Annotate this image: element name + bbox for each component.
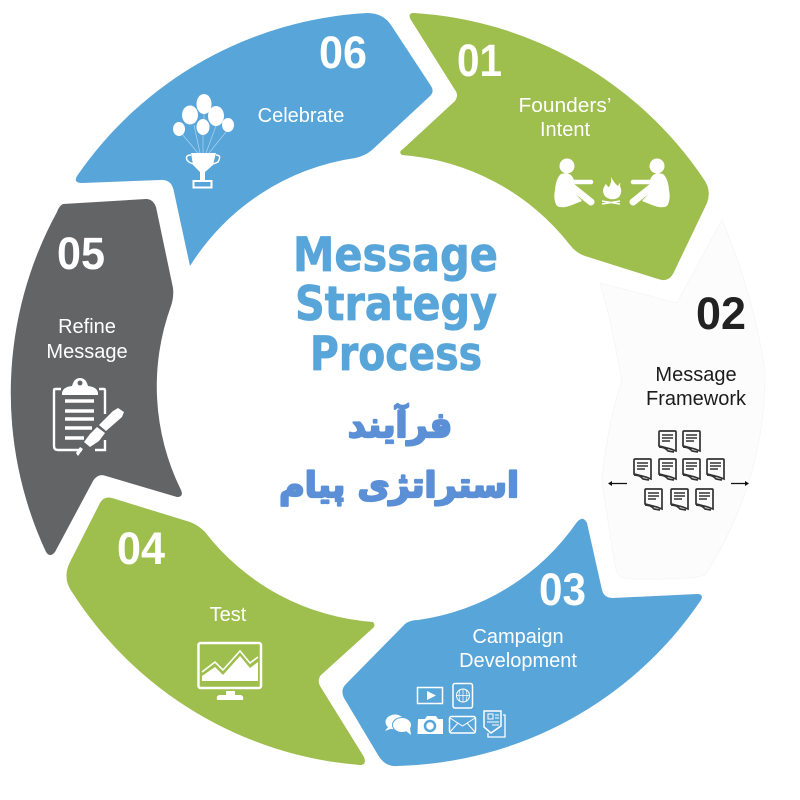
icon: document grid with arrows [608,431,749,510]
number 04: 04 [117,523,165,574]
icon: trophy with balloons [173,94,234,188]
panel: step 02 Message Framework [600,220,765,579]
number 06: 06 [319,27,367,78]
number 02: 02 [696,288,746,339]
label: Refine Message: Refine [58,316,116,338]
icon: clipboard and pen [54,378,124,456]
label: Campaign Development: Campaign [472,626,564,648]
label: Founders' Intent: Founders’ [518,95,612,117]
label: Test: Test [210,604,247,626]
number 05: 05 [57,228,105,279]
title: Message Strategy Process: Strategy [295,277,497,332]
label: Refine Message: Message [46,341,128,363]
icon: media channels [385,684,505,737]
title: Persian: فرآیند [348,403,452,446]
icon: two people around a campfire [554,158,670,207]
label: Celebrate: Celebrate [258,105,344,127]
label: Founders' Intent: Intent [540,119,590,141]
title: Persian [279,403,519,506]
title: Message Strategy Process [293,228,498,382]
title: Persian: استراتژی پیام [279,466,519,506]
panel: step 04 Test [66,498,374,765]
panel: step 06 Celebrate [76,13,433,266]
title: Message Strategy Process: Process [310,327,482,382]
icon: monitor with chart [198,643,261,700]
label: Message Framework: Message [655,364,737,386]
number 01: 01 [457,35,502,86]
label: Campaign Development: Development [459,650,577,672]
panel: step 03 Campaign Development [342,519,702,766]
title: Message Strategy Process: Message [293,228,498,283]
number 03: 03 [539,564,586,615]
panel: step 05 Refine Message [11,199,182,555]
label: Message Framework: Framework [646,388,747,410]
panel: step 01 Founders' Intent [400,13,709,280]
